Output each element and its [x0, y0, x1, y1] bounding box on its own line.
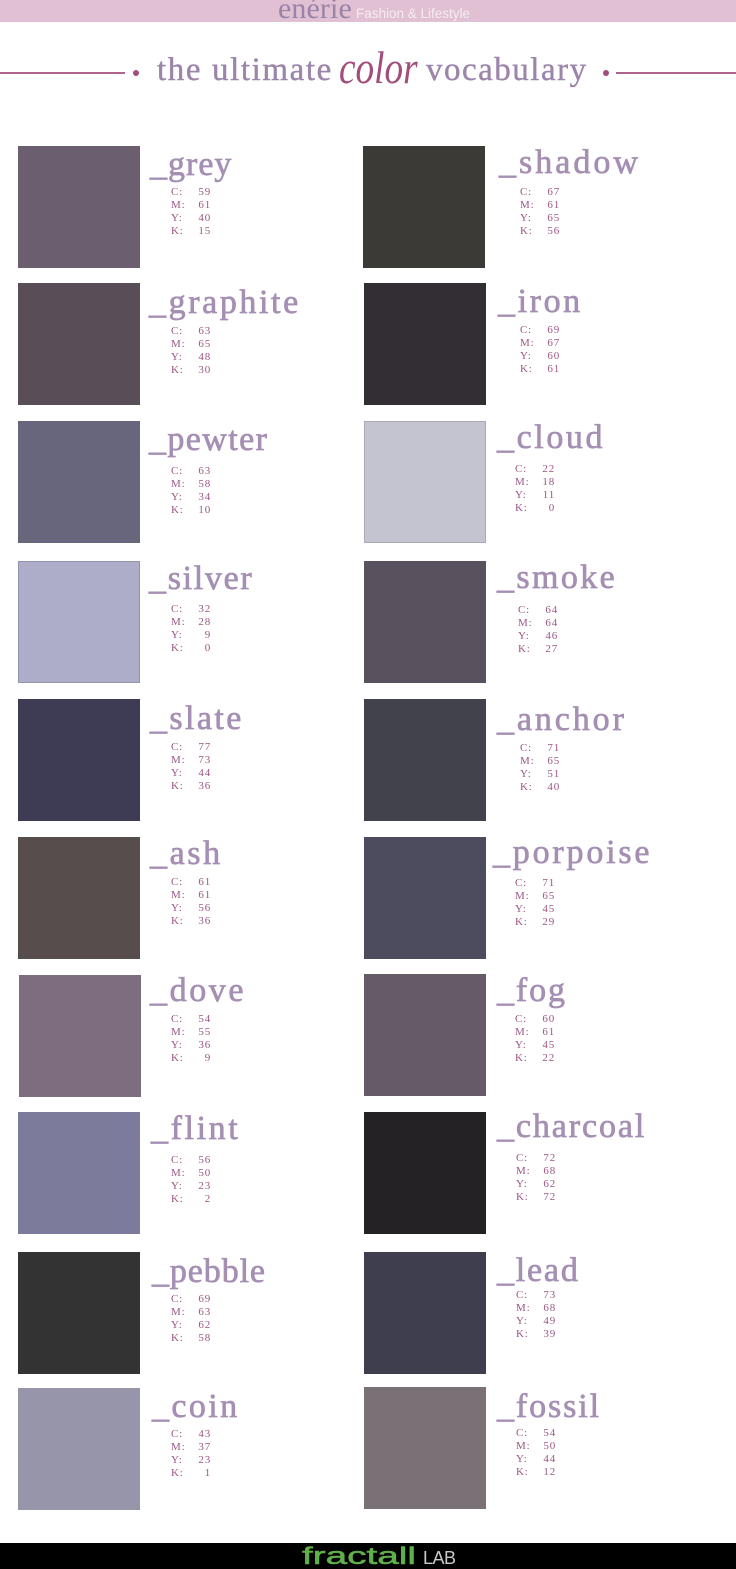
text: Y:: [171, 1180, 183, 1192]
text: M:: [516, 1164, 530, 1176]
text: C:: [520, 324, 532, 336]
text: 1: [205, 1466, 211, 1478]
text: _flint: [151, 1110, 240, 1147]
text: 44: [543, 1452, 556, 1464]
text: 36: [198, 914, 211, 926]
text: Y:: [516, 1314, 528, 1326]
text: _anchor: [497, 701, 627, 738]
text: K:: [518, 642, 531, 654]
text: Y:: [518, 630, 530, 642]
text: M:: [171, 1026, 185, 1038]
text: M:: [171, 1306, 185, 1318]
colour card: pebble: [18, 1252, 266, 1374]
colour card: lead: [364, 1252, 580, 1374]
text: 67: [547, 186, 560, 198]
text: C:: [171, 1012, 183, 1024]
text: 23: [198, 1454, 211, 1466]
colour card: shadow: [363, 144, 641, 268]
text: 61: [198, 198, 211, 210]
text: 9: [205, 628, 211, 640]
text: _ash: [150, 835, 223, 872]
text: M:: [520, 198, 534, 210]
text: 71: [542, 876, 555, 888]
text: 61: [198, 876, 211, 888]
text: 32: [198, 602, 211, 614]
text: 18: [542, 476, 555, 488]
text: 50: [198, 1166, 211, 1178]
text: 72: [543, 1190, 556, 1202]
text: 65: [198, 338, 211, 350]
footer bar with logo: [0, 1543, 736, 1569]
title: [0, 42, 736, 93]
text: 15: [198, 224, 211, 236]
text: 73: [543, 1288, 556, 1300]
text: M:: [515, 1026, 529, 1038]
colour card: porpoise: [364, 834, 652, 959]
text: K:: [171, 780, 184, 792]
text: C:: [516, 1152, 528, 1164]
text: M:: [171, 338, 185, 350]
text: M:: [171, 478, 185, 490]
text: Y:: [520, 212, 532, 224]
text: 65: [547, 754, 560, 766]
text: _silver: [149, 560, 253, 597]
text: _porpoise: [493, 834, 652, 871]
text: M:: [515, 476, 529, 488]
text: C:: [171, 1154, 183, 1166]
text: 72: [543, 1152, 556, 1164]
text: C:: [171, 464, 183, 476]
colour card: slate: [18, 699, 244, 821]
text: 63: [198, 1306, 211, 1318]
text: C:: [171, 740, 183, 752]
text: _fog: [497, 972, 567, 1009]
title: vocabulary: [426, 52, 588, 88]
footer bar with logo: LAB: [423, 1548, 456, 1568]
text: M:: [171, 198, 185, 210]
text: M:: [171, 1440, 185, 1452]
text: _fossil: [497, 1388, 601, 1425]
text: 46: [545, 630, 558, 642]
text: 77: [198, 740, 211, 752]
text: C:: [520, 742, 532, 754]
text: M:: [171, 1166, 185, 1178]
text: C:: [171, 1292, 183, 1304]
text: C:: [520, 186, 532, 198]
colour card: charcoal: [364, 1108, 646, 1234]
text: Y:: [171, 1318, 183, 1330]
text: _dove: [150, 972, 246, 1009]
colour card: graphite: [18, 283, 301, 405]
text: M:: [516, 1440, 530, 1452]
colour card: silver: [18, 560, 253, 683]
text: Y:: [516, 1178, 528, 1190]
text: _shadow: [499, 144, 641, 181]
text: C:: [516, 1288, 528, 1300]
text: K:: [516, 1466, 529, 1478]
text: 62: [198, 1318, 211, 1330]
text: 37: [198, 1440, 211, 1452]
text: C:: [171, 876, 183, 888]
text: 63: [198, 464, 211, 476]
text: 65: [547, 212, 560, 224]
text: C:: [518, 604, 530, 616]
title: the ultimate: [157, 52, 333, 88]
text: Y:: [520, 350, 532, 362]
text: _smoke: [497, 559, 617, 596]
text: 48: [198, 350, 211, 362]
text: K:: [516, 1190, 529, 1202]
text: C:: [515, 1012, 527, 1024]
text: 36: [198, 780, 211, 792]
text: 22: [542, 462, 555, 474]
text: _grey: [150, 146, 232, 183]
header bar: [0, 0, 736, 22]
text: 55: [198, 1026, 211, 1038]
colour card: anchor: [364, 699, 627, 821]
text: K:: [171, 1052, 184, 1064]
text: Y:: [515, 902, 527, 914]
text: K:: [520, 362, 533, 374]
text: K:: [171, 224, 184, 236]
text: 22: [542, 1052, 555, 1064]
text: 62: [543, 1178, 556, 1190]
colour card: smoke: [364, 559, 617, 683]
text: M:: [171, 754, 185, 766]
text: _graphite: [149, 284, 301, 321]
text: 28: [198, 616, 211, 628]
text: 0: [549, 502, 555, 514]
text: 69: [198, 1292, 211, 1304]
text: C:: [171, 324, 183, 336]
text: Y:: [515, 488, 527, 500]
text: 9: [205, 1052, 211, 1064]
text: 73: [198, 754, 211, 766]
colour card: ash: [18, 835, 223, 959]
text: 58: [198, 478, 211, 490]
text: M:: [515, 890, 529, 902]
text: _iron: [498, 283, 583, 320]
text: C:: [516, 1426, 528, 1438]
text: 44: [198, 766, 211, 778]
text: 34: [198, 490, 211, 502]
text: 63: [198, 324, 211, 336]
colour card: dove: [19, 972, 246, 1097]
text: K:: [171, 642, 184, 654]
text: C:: [515, 876, 527, 888]
text: 56: [547, 224, 560, 236]
text: 60: [547, 350, 560, 362]
text: 61: [198, 888, 211, 900]
text: 64: [545, 616, 558, 628]
text: 40: [198, 212, 211, 224]
text: 61: [547, 198, 560, 210]
text: M:: [171, 616, 185, 628]
colour card: pewter: [18, 421, 268, 543]
text: 11: [543, 488, 555, 500]
colour card: grey: [18, 146, 232, 268]
text: K:: [171, 1192, 184, 1204]
text: K:: [520, 224, 533, 236]
colour card: iron: [364, 283, 583, 405]
text: Y:: [171, 1038, 183, 1050]
text: 56: [198, 902, 211, 914]
text: Y:: [171, 212, 183, 224]
text: _pewter: [149, 421, 268, 458]
colour card: coin: [18, 1388, 240, 1510]
text: Y:: [171, 490, 183, 502]
text: _pebble: [152, 1253, 266, 1290]
text: _cloud: [497, 419, 605, 456]
text: K:: [515, 1052, 528, 1064]
text: 50: [543, 1440, 556, 1452]
text: 10: [198, 504, 211, 516]
text: M:: [171, 888, 185, 900]
text: 30: [198, 364, 211, 376]
text: 45: [542, 902, 555, 914]
text: C:: [515, 462, 527, 474]
text: Y:: [171, 628, 183, 640]
text: C:: [171, 1428, 183, 1440]
text: K:: [171, 1332, 184, 1344]
text: _charcoal: [497, 1108, 646, 1145]
text: 54: [198, 1012, 211, 1024]
text: 27: [545, 642, 558, 654]
text: M:: [516, 1302, 530, 1314]
text: 71: [547, 742, 560, 754]
text: 23: [198, 1180, 211, 1192]
text: Y:: [171, 350, 183, 362]
text: Y:: [171, 1454, 183, 1466]
text: 36: [198, 1038, 211, 1050]
text: 2: [205, 1192, 211, 1204]
text: Y:: [171, 766, 183, 778]
text: M:: [520, 754, 534, 766]
text: K:: [171, 504, 184, 516]
text: 61: [547, 362, 560, 374]
text: _lead: [497, 1252, 580, 1289]
colour card: flint: [18, 1110, 240, 1234]
text: 0: [205, 642, 211, 654]
text: 40: [547, 780, 560, 792]
text: Y:: [516, 1452, 528, 1464]
colour card: cloud: [364, 419, 605, 543]
text: 58: [198, 1332, 211, 1344]
text: _coin: [152, 1388, 240, 1425]
text: 12: [543, 1466, 556, 1478]
title: color: [339, 42, 418, 93]
text: 59: [198, 186, 211, 198]
text: Y:: [520, 768, 532, 780]
text: 65: [542, 890, 555, 902]
text: 51: [547, 768, 560, 780]
text: 67: [547, 336, 560, 348]
text: K:: [171, 914, 184, 926]
text: 29: [542, 916, 555, 928]
text: K:: [515, 502, 528, 514]
text: 68: [543, 1302, 556, 1314]
text: K:: [516, 1328, 529, 1340]
text: 49: [543, 1314, 556, 1326]
text: 56: [198, 1154, 211, 1166]
text: M:: [518, 616, 532, 628]
text: K:: [515, 916, 528, 928]
text: 60: [542, 1012, 555, 1024]
text: 43: [198, 1428, 211, 1440]
colour card: fog: [364, 972, 567, 1096]
text: 61: [542, 1026, 555, 1038]
text: 39: [543, 1328, 556, 1340]
text: 69: [547, 324, 560, 336]
text: C:: [171, 602, 183, 614]
text: K:: [171, 1466, 184, 1478]
text: M:: [520, 336, 534, 348]
text: 64: [545, 604, 558, 616]
text: C:: [171, 186, 183, 198]
text: 45: [542, 1038, 555, 1050]
text: _slate: [150, 700, 244, 737]
text: 54: [543, 1426, 556, 1438]
text: Y:: [515, 1038, 527, 1050]
text: K:: [520, 780, 533, 792]
text: Y:: [171, 902, 183, 914]
brand tagline: Fashion & Lifestyle: [356, 6, 470, 21]
text: K:: [171, 364, 184, 376]
colour card: fossil: [364, 1387, 601, 1509]
text: 68: [543, 1164, 556, 1176]
